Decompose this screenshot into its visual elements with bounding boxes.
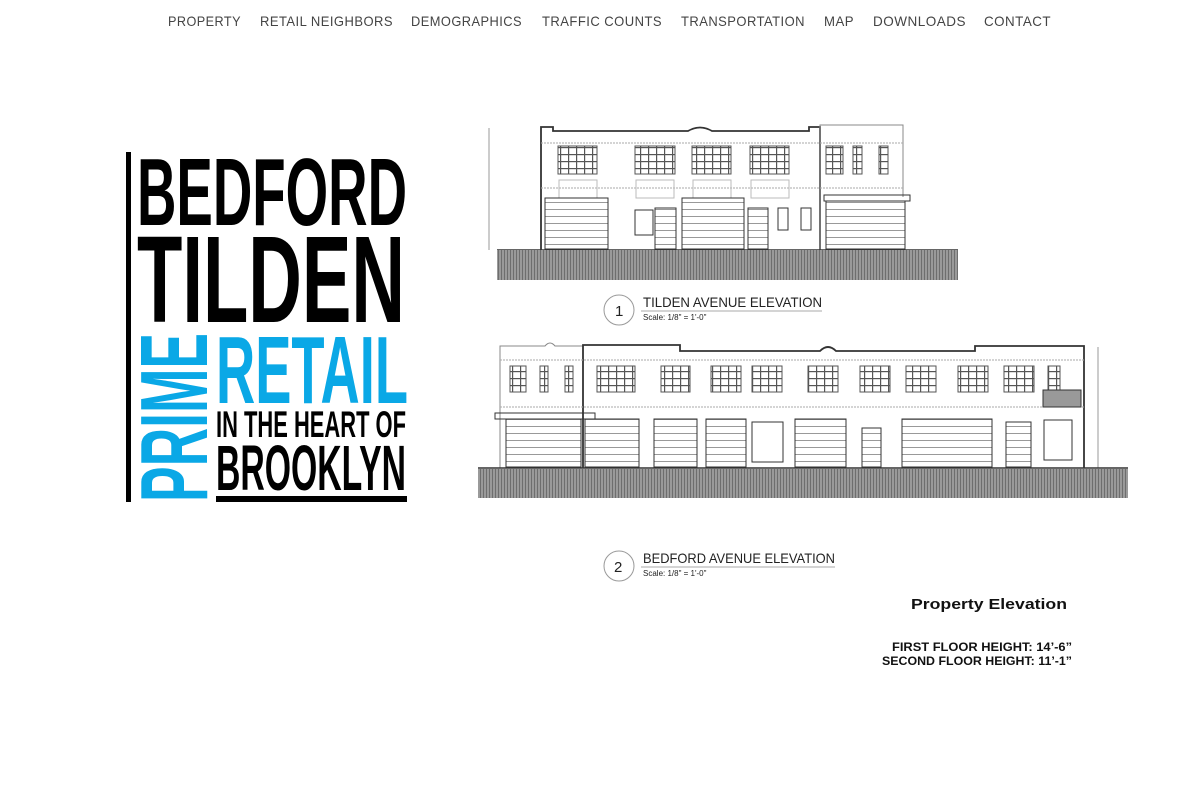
nav menu: PROPERTY	[168, 13, 241, 29]
nav menu: RETAIL NEIGHBORS	[260, 13, 393, 29]
nav menu: TRANSPORTATION	[681, 13, 805, 29]
label: Bedford Avenue elevation: Scale: 1/8" = 1'-0"	[643, 569, 707, 578]
nav menu: MAP	[824, 13, 854, 29]
logo: Bedford Tilden Prime Retail: TILDEN	[137, 212, 405, 349]
label: Tilden Avenue elevation: TILDEN AVENUE ELEVATION	[643, 294, 822, 310]
ground: Tilden	[497, 250, 958, 280]
text: floor heights	[882, 640, 1072, 668]
nav menu: DOWNLOADS	[873, 13, 966, 29]
label: Bedford Avenue elevation: BEDFORD AVENUE ELEVATION	[643, 550, 835, 566]
drawing: Bedford Avenue elevation	[478, 343, 1128, 468]
label: Tilden Avenue elevation: 1	[615, 303, 623, 320]
logo: Bedford Tilden Prime Retail	[121, 139, 408, 504]
label: Bedford Avenue elevation	[604, 550, 835, 581]
nav menu: TRAFFIC COUNTS	[542, 13, 662, 29]
logo: Bedford Tilden Prime Retail: PRIME	[121, 333, 228, 502]
heading: Property Elevation: Property Elevation	[911, 596, 1067, 613]
nav menu: DEMOGRAPHICS	[411, 13, 522, 29]
label: Tilden Avenue elevation	[604, 294, 822, 325]
ground: Bedford	[478, 469, 1128, 498]
logo: Bedford Tilden Prime Retail: IN THE HEART OF	[216, 404, 406, 445]
logo: Bedford Tilden Prime Retail: RETAIL	[216, 317, 408, 424]
nav menu	[168, 13, 1051, 29]
drawing: Tilden Avenue elevation	[489, 125, 958, 250]
label: Tilden Avenue elevation: Scale: 1/8" = 1'-0"	[643, 313, 707, 322]
logo: Bedford Tilden Prime Retail: BROOKLYN	[216, 432, 406, 504]
label: Bedford Avenue elevation: 2	[614, 559, 622, 576]
logo: Bedford Tilden Prime Retail: BEDFORD	[137, 139, 407, 246]
text: floor heights: SECOND FLOOR HEIGHT: 11’-1”	[882, 654, 1072, 668]
nav menu: CONTACT	[984, 13, 1051, 29]
text: floor heights: FIRST FLOOR HEIGHT: 14’-6”	[892, 640, 1072, 654]
